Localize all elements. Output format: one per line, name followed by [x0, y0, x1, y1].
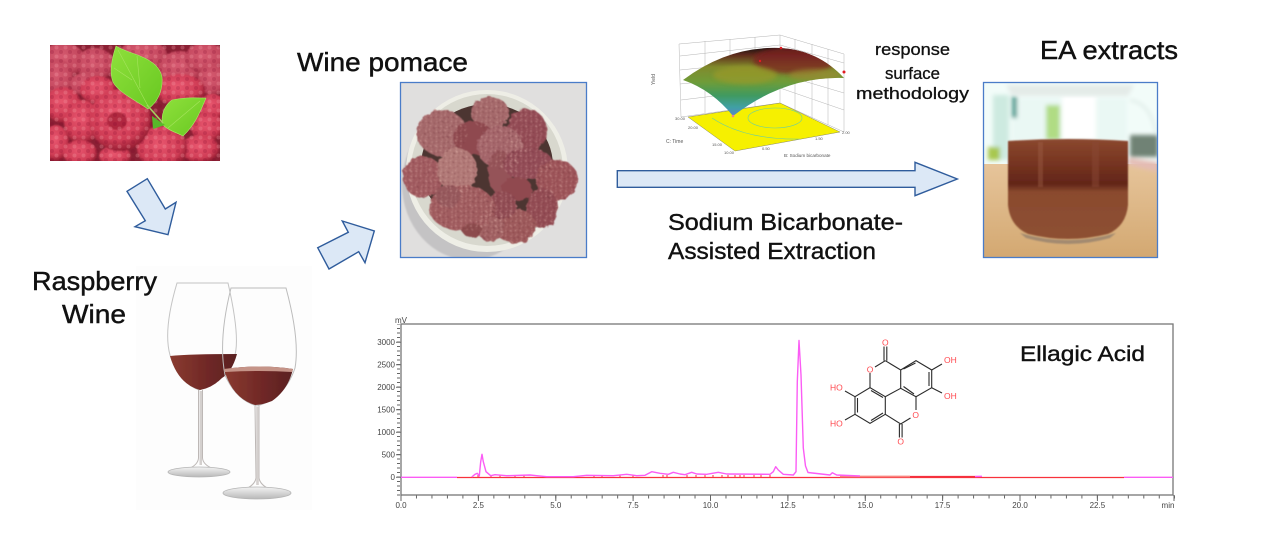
chart: response surface plot: 15.00 — [712, 142, 723, 147]
x axis labels: min — [1162, 501, 1174, 510]
molecule: ellagic acid: O — [867, 364, 874, 374]
label: Ellagic Acid: Ellagic Acid — [1020, 343, 1145, 366]
x axis labels: 0.0 — [395, 501, 407, 510]
photo: raspberries with leaves — [50, 45, 220, 161]
x axis labels: 17.5 — [935, 501, 951, 510]
label: response surface methodology: surface — [885, 64, 940, 83]
x axis labels: 15.0 — [858, 501, 874, 510]
y axis labels: 500 — [382, 450, 396, 460]
chart: HPLC chromatogram — [377, 316, 1175, 510]
red baseline and integration marks — [457, 475, 1124, 478]
chart: response surface plot: 30.00 — [675, 116, 686, 121]
heading: Raspberry Wine: Raspberry — [32, 266, 157, 296]
molecule: ellagic acid: OH — [944, 355, 957, 365]
x axis labels: 2.5 — [473, 501, 485, 510]
x axis labels: 7.5 — [628, 501, 639, 510]
left glass — [168, 283, 237, 477]
brown liquid — [1008, 139, 1128, 239]
x axis labels — [395, 501, 1174, 510]
arrow: raspberries to wine — [127, 179, 176, 235]
molecule: ellagic acid: HO — [830, 418, 843, 428]
heading: Wine pomace: Wine pomace — [297, 47, 468, 77]
plot frame — [401, 324, 1173, 495]
x axis labels: 12.5 — [780, 501, 796, 510]
photo: jar of EA extract — [983, 82, 1158, 258]
molecule: ellagic acid: O — [882, 338, 889, 348]
molecule: ellagic acid — [830, 338, 957, 447]
label: Sodium Bicarbonate-Assisted Extraction: Sodium Bicarbonate- — [668, 209, 903, 235]
chart: response surface plot: 10.00 — [724, 150, 735, 155]
heading: EA extracts: EA extracts — [1040, 35, 1178, 65]
heading: Raspberry Wine — [32, 266, 157, 329]
arrow: wine to pomace — [318, 221, 374, 269]
y axis labels: 3000 — [377, 338, 396, 347]
y axis ticks — [396, 324, 401, 496]
right glass — [223, 288, 296, 499]
chart: response surface plot: 1.50 — [815, 136, 824, 141]
y axis labels: 1000 — [377, 428, 396, 437]
chart: response surface plot — [651, 35, 851, 158]
y axis labels — [377, 338, 396, 482]
magenta signal trace — [401, 340, 1173, 477]
y axis labels: 1500 — [377, 406, 396, 414]
chart: HPLC chromatogram: mV — [395, 316, 408, 325]
chart: response surface plot: 20.00 — [688, 125, 699, 130]
label: response surface methodology: methodology — [856, 84, 970, 103]
chart: response surface plot: C: Time — [666, 139, 683, 145]
back walls and grid — [679, 35, 844, 132]
molecule: ellagic acid: OH — [944, 391, 957, 401]
icon: small leaf — [162, 98, 206, 136]
x axis ticks — [400, 495, 1175, 501]
x axis labels: 10.0 — [703, 501, 719, 510]
jar lid rim — [1006, 85, 1134, 96]
x axis labels: 20.0 — [1012, 501, 1028, 510]
chart: response surface plot: 0.50 — [762, 146, 771, 151]
y axis labels: 0 — [391, 473, 396, 482]
molecule: ellagic acid: HO — [830, 383, 843, 393]
y axis labels: 2500 — [377, 360, 396, 370]
label: Sodium Bicarbonate-Assisted Extraction — [668, 209, 903, 264]
molecule: ellagic acid: O — [897, 437, 904, 447]
photo: bowl of wine pomace — [400, 82, 587, 260]
icon: large leaf — [111, 46, 162, 109]
photo: two wine glasses — [136, 266, 312, 510]
label: response surface methodology — [856, 40, 970, 103]
chart: response surface plot: B: Sodium bicarbonate — [784, 153, 831, 158]
label: Sodium Bicarbonate-Assisted Extraction: Assisted Extraction — [668, 238, 876, 264]
chart: response surface plot: 2.00 — [842, 130, 851, 135]
heading: Raspberry Wine: Wine — [62, 299, 126, 329]
label: response surface methodology: response — [875, 40, 950, 59]
arrow: pomace to EA extracts — [617, 162, 957, 196]
axis labels: Yield — [651, 74, 657, 85]
x axis labels: 5.0 — [550, 501, 562, 510]
3D yield surface — [683, 48, 844, 116]
y axis labels: 2000 — [377, 383, 396, 392]
molecule: ellagic acid: O — [912, 410, 919, 420]
x axis labels: 22.5 — [1090, 501, 1106, 510]
yellow contour floor — [688, 103, 840, 151]
